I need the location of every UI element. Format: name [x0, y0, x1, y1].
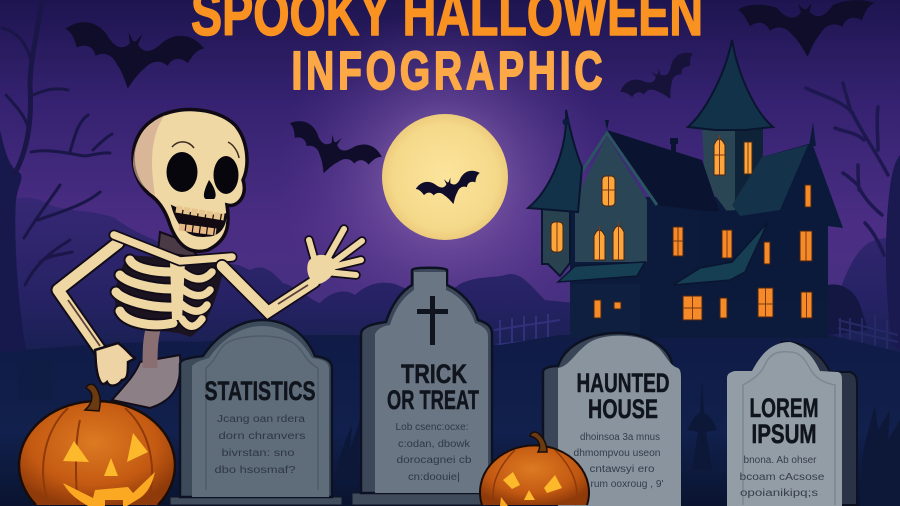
nose	[104, 458, 118, 476]
right arm	[222, 266, 314, 312]
collarbone	[114, 235, 232, 261]
left turret wall	[542, 208, 570, 276]
body text: c:odan, dbowk	[398, 439, 471, 450]
heading: HAUNTED	[576, 368, 670, 398]
body text: dhmompvou useon	[574, 448, 660, 459]
mouth	[63, 472, 155, 506]
body text	[396, 422, 472, 483]
inner border	[206, 336, 318, 490]
eyes	[503, 472, 562, 493]
right tree	[806, 83, 900, 350]
body text: dbo hsosmaf?	[214, 465, 296, 476]
body text: bnona. Ab ohser	[744, 455, 817, 466]
lower windows	[594, 185, 812, 320]
skull shading	[133, 115, 165, 195]
tombstone: statistics	[170, 320, 342, 505]
body text	[574, 432, 664, 490]
front gable wall	[575, 136, 647, 262]
stone side	[543, 333, 680, 505]
body text	[214, 414, 306, 476]
large pumpkin	[19, 384, 175, 506]
tower roof	[688, 40, 773, 130]
left arm	[58, 243, 118, 353]
full moon	[382, 114, 508, 240]
right hand	[307, 229, 362, 284]
eyes	[63, 433, 148, 462]
dark bush	[828, 284, 868, 335]
stone base	[170, 497, 342, 505]
left ribs	[116, 260, 173, 325]
body text: dorocagnei cb	[396, 455, 472, 466]
bat: on moon	[415, 169, 486, 212]
bat: top right	[738, 0, 878, 60]
cross	[417, 296, 448, 345]
haunted house	[528, 40, 843, 338]
tombstone: haunted house: HOUSE	[588, 394, 658, 424]
stone base	[352, 493, 492, 505]
mouth	[500, 497, 508, 506]
ridges	[493, 450, 577, 505]
nose	[524, 490, 535, 500]
distant hills	[0, 198, 900, 506]
stone face	[192, 326, 329, 497]
left porch roof	[558, 262, 645, 282]
foreground ground	[0, 335, 900, 506]
rib cage dark	[115, 255, 225, 337]
bat: top left	[58, 19, 205, 98]
body text	[740, 455, 825, 499]
main roof	[607, 130, 720, 213]
body text: bivrstan: sno	[222, 448, 295, 459]
right bushes and fence	[828, 284, 898, 355]
left fence	[494, 314, 560, 355]
grass	[335, 420, 360, 480]
gable trim	[558, 133, 657, 208]
upper windows	[551, 139, 752, 260]
trunk	[0, 130, 26, 360]
body text: cn:doouie|	[408, 472, 460, 483]
lower house base	[570, 284, 640, 338]
spine	[150, 320, 156, 368]
right roof	[700, 143, 843, 300]
sternum	[170, 262, 185, 320]
tombstone: haunted house	[543, 333, 681, 506]
ridges	[43, 408, 152, 505]
tombstone: trick or treat	[352, 268, 492, 505]
left hand	[95, 343, 136, 386]
window bars	[557, 135, 806, 320]
heading: TRICK	[401, 359, 467, 389]
body text: opoianikipq;s	[740, 488, 818, 499]
body text: Lob csenc:ocxe:	[396, 422, 468, 433]
title line 2: INFOGRAPHIC	[291, 40, 603, 100]
brows	[172, 142, 239, 158]
stem	[85, 384, 100, 411]
stone side	[180, 320, 332, 497]
body text: dorn chranvers	[218, 431, 306, 442]
bat: beside moon	[278, 117, 384, 190]
skeleton	[58, 110, 362, 408]
mouth	[172, 206, 226, 236]
tombstone: trick or treat: OR TREAT	[387, 385, 479, 415]
inner border	[743, 352, 835, 505]
tombstone: lorem ipsum	[727, 342, 857, 506]
moon glow	[260, 0, 630, 360]
right ribs	[180, 270, 212, 326]
body text: bcoam cAcsose	[740, 472, 825, 483]
skull	[133, 110, 247, 251]
small pumpkin	[480, 432, 589, 506]
neck	[158, 232, 200, 258]
teeth	[176, 209, 224, 217]
bat: above house	[618, 49, 707, 118]
heading: STATISTICS	[204, 376, 316, 406]
right porch roof	[673, 222, 768, 285]
stone face	[375, 272, 488, 493]
left eye	[166, 152, 198, 192]
heading: LOREM	[750, 393, 818, 423]
left turret roof	[528, 110, 582, 212]
body	[480, 445, 589, 505]
title	[191, 0, 703, 100]
right eye	[214, 156, 238, 194]
trunk	[886, 155, 900, 350]
stone face	[558, 336, 681, 506]
tombstone: lorem ipsum: IPSUM	[752, 419, 816, 449]
stone side	[780, 342, 857, 505]
stone side	[361, 268, 492, 493]
stone face	[727, 342, 842, 506]
house body	[570, 197, 828, 338]
nose	[204, 180, 216, 199]
distant grave silhouettes	[18, 360, 900, 506]
body text: cntawsyi ero	[590, 464, 655, 475]
stem	[530, 432, 547, 452]
tower	[702, 127, 763, 222]
body text: Jcang oan rdera	[217, 414, 306, 425]
left tree	[0, 0, 112, 360]
pelvis	[112, 355, 180, 408]
body	[19, 401, 175, 505]
body text: dhoinsoa 3a mnus	[580, 432, 660, 443]
body text: rum ooxroug , 9'	[590, 479, 664, 490]
